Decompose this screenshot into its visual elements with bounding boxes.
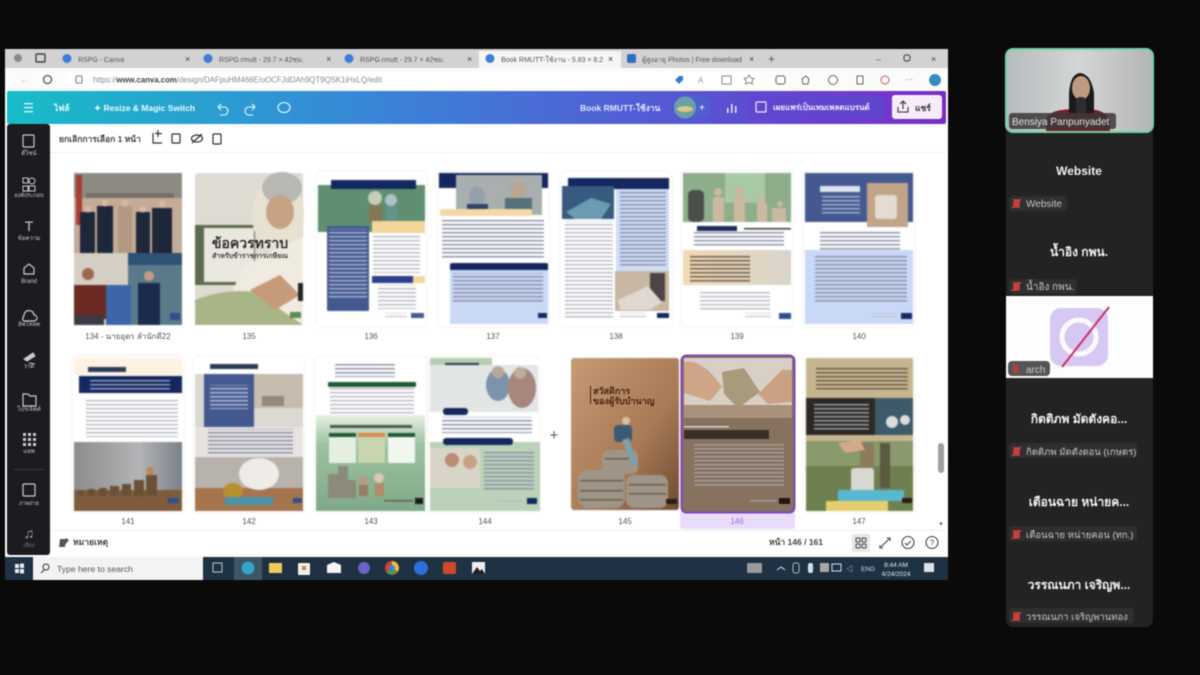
page thumbnail 145: สวัสดิการ	[593, 386, 630, 396]
participant: เตือนฉาย: เตือนฉาย หน่ายค...	[1029, 495, 1129, 509]
page thumbnail 144	[428, 356, 540, 513]
scrollbar: ▾	[939, 521, 943, 528]
footer status bar: หน้า 146 / 161	[769, 537, 823, 547]
page thumbnail 138	[560, 171, 672, 327]
page thumbnail 136	[316, 171, 427, 327]
participant: วรรณนภา: วรรณนภา เจริญพ...	[1028, 578, 1130, 592]
page thumbnail 146 selected: 146	[730, 517, 744, 526]
participant: arch logo tile: arch	[1026, 365, 1045, 376]
page thumbnail 145: ของผู้รับบำนาญ	[593, 396, 655, 407]
page label 139: 139	[730, 332, 744, 341]
participant: Website: Website	[1056, 164, 1102, 178]
left tool rail: เสียง	[23, 542, 35, 549]
address bar	[5, 68, 948, 91]
page thumbnail 143	[314, 356, 427, 513]
browser tab strip: ×	[931, 54, 936, 64]
Canva top toolbar: แชร์	[915, 103, 931, 113]
left tool rail: อัพโหลด	[18, 320, 40, 328]
page thumbnail 134	[74, 173, 182, 325]
left tool rail: องค์ประกอบ	[14, 192, 44, 199]
page thumbnail 135: สำหรับข้าราชการเกษียณ	[212, 251, 288, 260]
left tool rail: Brand	[21, 279, 37, 285]
windows taskbar: 8:44 AM	[884, 562, 908, 569]
left tool rail: ภาพถ่าย	[19, 501, 39, 507]
windows taskbar	[5, 557, 948, 580]
address bar: ←	[20, 75, 30, 86]
windows taskbar: ENG	[861, 566, 875, 573]
browser tab strip: RSPG - Canva	[78, 57, 124, 64]
page thumbnail 135	[195, 172, 304, 325]
browser tab strip: ผู้สูงอายุ Photos | Free download	[642, 56, 742, 64]
active speaker video	[1006, 49, 1153, 132]
page thumbnail 146 selected	[680, 356, 795, 529]
participant: นํ้าอิง กพน.: น้ำอิง กพน.	[1026, 279, 1074, 293]
browser tab strip: ×	[749, 54, 754, 64]
participant: นํ้าอิง กพน.: น้ำอิง กพน.	[1050, 242, 1108, 259]
left tool rail: วาด	[24, 364, 34, 370]
browser tab strip: ×	[326, 54, 331, 64]
participant: วรรณนภา	[1009, 578, 1134, 623]
page label 136: 136	[364, 332, 378, 341]
windows taskbar: ◁	[846, 565, 853, 573]
scrollbar	[938, 443, 944, 528]
Canva top toolbar: Book RMUTT-ใช้งาน	[580, 103, 661, 113]
browser tab strip: ×	[608, 54, 613, 64]
left tool rail: ข้อความ	[18, 235, 40, 242]
participant: กิตติภพ: กิตติภพ มัดตังตอน (เกษตร)	[1026, 447, 1136, 458]
participant: กิตติภพ	[1009, 412, 1137, 458]
left tool rail: ♫	[24, 525, 34, 541]
windows taskbar: 4/24/2024	[882, 571, 911, 578]
participant: เตือนฉาย: เตือนฉาย หน่ายคอน (ทก.)	[1026, 530, 1133, 541]
active speaker video: Bensiya Panpunyadet	[1012, 117, 1110, 128]
participant: วรรณนภา: วรรณนภา เจริญพานทอง	[1026, 612, 1128, 623]
browser tab strip: ×	[185, 54, 190, 64]
page label 141: 141	[121, 517, 135, 526]
page label 135: 135	[242, 332, 256, 341]
participant panel	[1006, 48, 1153, 627]
browser tab strip: ×	[467, 54, 472, 64]
page thumbnail 142	[193, 356, 305, 513]
page action bar: ยกเลิกการเลือก 1 หน้า	[59, 134, 141, 144]
page thumbnail 147	[804, 356, 915, 513]
participant: นํ้าอิง กพน.	[1009, 242, 1108, 294]
browser tab strip: Book RMUTT-ใช้งาน - 5.83 × 8.2	[501, 55, 603, 64]
left tool rail: โปรเจ็คต์	[17, 404, 41, 413]
page thumbnail 137	[438, 171, 549, 327]
footer status bar: ?	[930, 538, 935, 548]
browser tab strip	[5, 49, 948, 68]
Canva top toolbar: ✦ Resize & Magic Switch	[94, 103, 195, 113]
page thumbnail 140	[803, 171, 915, 327]
footer status bar: หมายเหตุ	[73, 537, 108, 548]
Canva top toolbar	[7, 91, 946, 124]
browser tab strip: RSPG.rmutt - 29.7 × 42ซม.	[219, 57, 304, 64]
browser tab strip: RSPG.rmutt - 29.7 × 42ซม.	[360, 57, 445, 64]
address bar: ···	[905, 75, 913, 84]
address bar: A	[698, 76, 704, 85]
add page plus button: +	[550, 427, 559, 444]
page label 144: 144	[478, 517, 492, 526]
participant: Website: Website	[1026, 199, 1062, 210]
Canva top toolbar: เผยแพร่เป็นเทมเพลตแบรนด์	[773, 101, 870, 112]
page label 140: 140	[852, 332, 866, 341]
participant: Website	[1009, 164, 1102, 211]
participant: กิตติภพ: กิตติภพ มัดตังคอ...	[1031, 412, 1127, 426]
address bar: https://www.canva.com/design/DAFpuHM466E/uOCFJdDAh9QT9QSK1iHxLQ/edit	[93, 76, 383, 84]
page thumbnail 135: ข้อควรทราบ	[212, 235, 288, 251]
left tool rail: T	[25, 218, 34, 234]
page label 138: 138	[609, 332, 623, 341]
participant: arch logo tile	[1006, 296, 1153, 378]
browser tab strip: –	[876, 54, 881, 64]
left tool rail: ดีไซน์	[21, 149, 37, 157]
page label 142: 142	[242, 517, 256, 526]
page label 145: 145	[618, 517, 632, 526]
windows taskbar: Type here to search	[57, 564, 133, 574]
Canva top toolbar: +	[699, 103, 705, 114]
page action bar	[59, 130, 221, 144]
Canva top toolbar: ไฟล์	[53, 103, 70, 113]
page label 143: 143	[364, 517, 378, 526]
page label 137: 137	[486, 332, 500, 341]
footer status bar	[50, 530, 946, 556]
browser window	[5, 49, 948, 580]
page thumbnail 145	[571, 358, 679, 510]
browser tab strip: +	[768, 52, 775, 66]
participant: เตือนฉาย	[1009, 495, 1137, 541]
page thumbnail 141	[72, 356, 184, 513]
page label 147: 147	[852, 517, 866, 526]
page label 134: 134 - นายอุดร ลำนักดี22	[85, 332, 171, 341]
left tool rail	[7, 124, 50, 555]
left tool rail: แอพ	[23, 448, 35, 455]
page thumbnail 139	[681, 171, 793, 327]
